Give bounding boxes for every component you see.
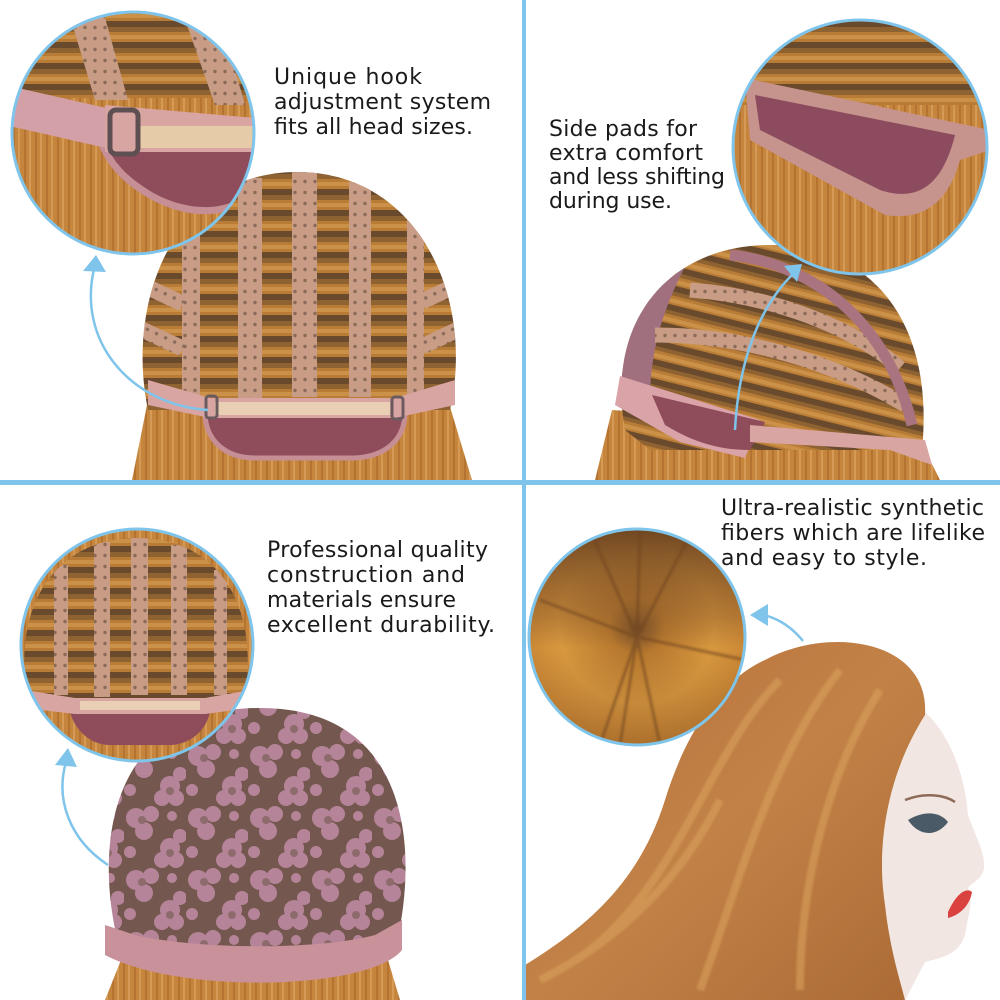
- callout circle: side pad detail: [730, 15, 990, 280]
- wig cap, side view: [622, 245, 924, 450]
- maroon back pad: [205, 412, 405, 458]
- text: synthetic fibers: [721, 496, 985, 571]
- panel: synthetic fibers: [525, 642, 984, 1000]
- text: durability: [267, 538, 495, 638]
- arrow: to side pad detail: [735, 264, 802, 430]
- text: side pads: and less shifting: [549, 165, 725, 190]
- adjustment strap: [148, 380, 455, 418]
- arrow: to crown detail: [750, 604, 803, 641]
- text: durability: Professional quality: [267, 538, 488, 563]
- lips: [948, 890, 972, 918]
- text: synthetic fibers: and easy to style.: [721, 546, 927, 571]
- bottom band: [105, 920, 402, 983]
- text: side pads: extra comfort: [549, 141, 703, 166]
- callout circle: cap detail: [20, 529, 255, 765]
- text: side pads: Side pads for: [549, 117, 698, 142]
- lace cap: [108, 708, 406, 946]
- text: hook adjustment: Unique hook: [274, 65, 422, 90]
- text: synthetic fibers: fibers which are lifelike: [721, 521, 985, 546]
- eyebrow: [905, 795, 955, 802]
- wig hair, back view: [132, 400, 472, 480]
- text: durability: materials ensure: [267, 588, 456, 613]
- text: hook adjustment: adjustment system: [274, 90, 491, 115]
- text: durability: excellent durability.: [267, 613, 495, 638]
- hook clips: [206, 396, 403, 419]
- strap: [750, 425, 932, 465]
- panel: hook adjustment system: [120, 172, 472, 480]
- mannequin face: [860, 712, 984, 1000]
- wig cap with wefts and lace bands: [142, 172, 456, 410]
- text: side pads: during use.: [549, 189, 672, 214]
- text: hook adjustment: [274, 65, 491, 140]
- wig hair, lace side: [105, 950, 400, 1000]
- hair highlights: [540, 670, 880, 990]
- panel: side pads: [595, 240, 940, 480]
- wig hair, side view: [595, 410, 940, 480]
- text: side pads: [549, 117, 725, 214]
- arrow: to cap detail: [55, 748, 108, 865]
- callout circle: hook detail: [10, 10, 256, 256]
- text: synthetic fibers: Ultra-realistic synthetic: [721, 496, 984, 521]
- text: hook adjustment: fits all head sizes.: [274, 115, 473, 140]
- panel: durability: [95, 705, 420, 1000]
- side pad: [615, 376, 760, 458]
- eye: [908, 813, 948, 833]
- callout circle: crown detail: [529, 529, 745, 745]
- text: durability: construction and: [267, 563, 465, 588]
- arrow: to hook detail: [83, 255, 208, 410]
- long hair: [525, 642, 925, 1000]
